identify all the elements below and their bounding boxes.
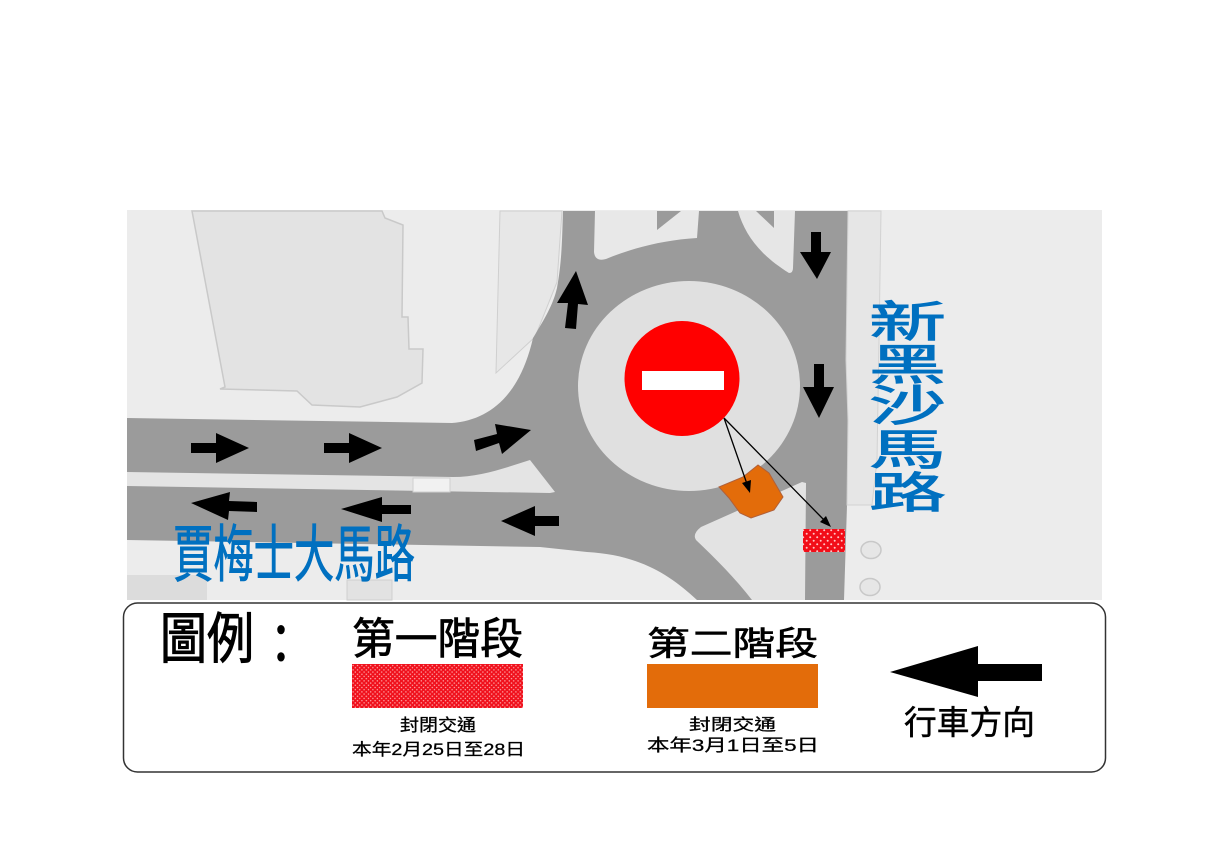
sign bar	[642, 371, 724, 390]
road name: vertical: 黑	[869, 342, 946, 390]
arrow: southbound 1	[800, 232, 831, 279]
arrow: eastbound 1	[191, 433, 249, 463]
phase one closure area	[803, 529, 845, 552]
northwest plot	[496, 211, 562, 373]
arrow: southbound 2	[803, 364, 834, 418]
southwest plot 1	[127, 575, 207, 600]
no entry sign	[624, 321, 740, 436]
phase one dates: 本年2月25日至28日	[352, 740, 525, 759]
southwest plot 2	[347, 580, 392, 600]
arrow: westbound 2	[341, 497, 411, 522]
driving direction label: 行車方向	[904, 704, 1035, 741]
phase one swatch	[352, 664, 523, 708]
arrow: westbound 3	[501, 506, 559, 536]
sign disc	[624, 321, 740, 436]
phase two heading: 第二階段	[647, 625, 818, 662]
panel: road map	[127, 210, 1102, 600]
arrow: driving direction key	[890, 646, 1042, 697]
north island left notch	[657, 211, 681, 230]
phase two closure area	[719, 465, 783, 518]
east footway	[846, 211, 881, 505]
phase one heading: 第一階段	[352, 616, 523, 664]
road name: vertical: 沙	[869, 383, 946, 431]
arrow: westbound 1	[191, 492, 257, 520]
north island left	[594, 211, 699, 260]
north island right notch	[756, 211, 774, 228]
legend title: 圖例	[160, 608, 254, 670]
phase one note: 封閉交通	[400, 716, 476, 735]
street furniture circle 2	[860, 578, 880, 596]
street furniture circle 1	[861, 542, 881, 558]
road name: vertical: 馬	[869, 427, 946, 475]
southeast island	[695, 482, 806, 600]
road name: vertical: 路	[869, 470, 946, 518]
pedestrian crossing	[413, 478, 450, 492]
roundabout centre	[578, 281, 800, 491]
phase two dates: 本年3月1日至5日	[647, 735, 819, 755]
legend frame	[124, 603, 1106, 772]
map background	[127, 210, 1102, 600]
median strip	[127, 460, 555, 493]
phase two swatch	[647, 664, 818, 708]
pointer arrow to phase two area	[724, 418, 751, 493]
road name: vertical: 新	[869, 299, 946, 347]
road name: Avenida: 賈梅士大馬路	[173, 521, 415, 590]
legend title: ：	[259, 614, 303, 676]
road network	[127, 211, 848, 600]
arrow: northbound	[557, 271, 588, 329]
arrow: eastbound 3	[474, 424, 531, 454]
panel: legend	[124, 603, 1106, 772]
north island right	[738, 211, 795, 273]
road name: vertical	[869, 299, 946, 518]
arrow: eastbound 2	[324, 433, 382, 463]
phase two note: 封閉交通	[689, 716, 776, 734]
pointer arrow to phase one area	[724, 418, 831, 527]
building block	[192, 211, 423, 407]
